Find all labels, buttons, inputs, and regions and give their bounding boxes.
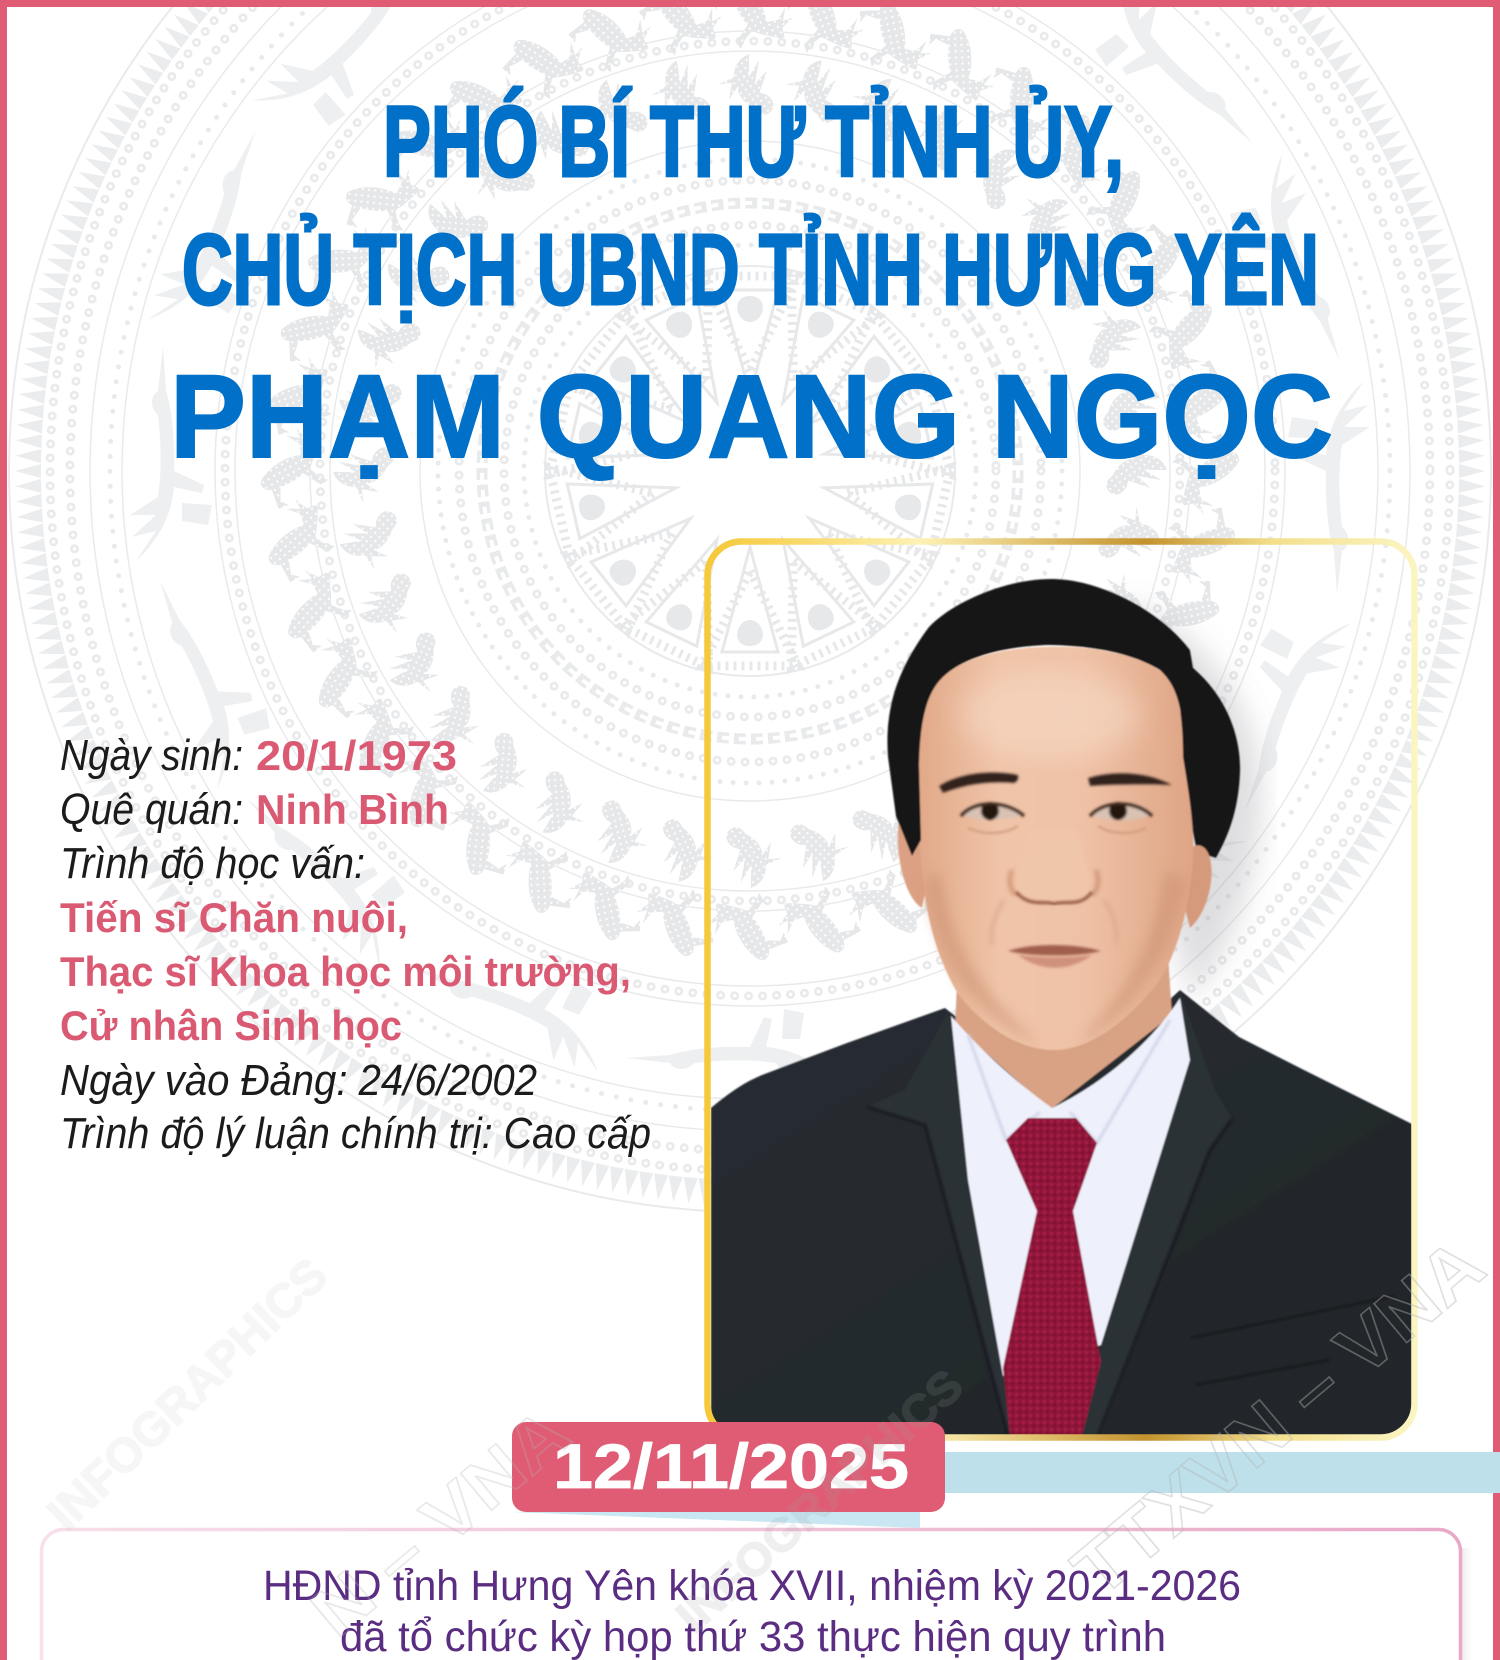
face xyxy=(917,647,1193,1050)
hair xyxy=(887,579,1197,856)
panel text xyxy=(263,1562,1241,1660)
education degrees xyxy=(60,894,631,1049)
watermarks xyxy=(38,1222,1499,1651)
left ear xyxy=(896,822,926,908)
birth date xyxy=(60,731,457,780)
birth date: Ngày sinh: xyxy=(60,731,243,780)
biography text block xyxy=(60,731,651,1158)
hometown xyxy=(60,785,449,834)
date badge xyxy=(512,1422,945,1512)
hometown: Ninh Bình xyxy=(256,786,449,833)
panel edge shadow xyxy=(1462,1548,1472,1660)
blue ribbon right of date xyxy=(945,1452,1500,1493)
eyes xyxy=(961,802,1152,833)
portrait photo xyxy=(711,579,1412,1440)
panel text: HĐND tỉnh Hưng Yên khóa XVII, nhiệm kỳ 2021-2026 xyxy=(263,1562,1241,1610)
political level: Trình độ lý luận chính trị: Cao cấp xyxy=(60,1109,651,1158)
title line 1: PHÓ BÍ THƯ TỈNH ỦY, xyxy=(383,86,1124,198)
party date: Ngày vào Đảng: 24/6/2002 xyxy=(60,1056,537,1105)
title name: PHẠM QUANG NGỌC xyxy=(170,351,1333,483)
lapel shading xyxy=(948,1008,1230,1434)
tie xyxy=(1003,1118,1101,1436)
gold photo frame xyxy=(708,542,1414,1438)
education degrees: Tiến sĩ Chăn nuôi, xyxy=(60,894,408,941)
nose xyxy=(1016,830,1091,905)
info panel xyxy=(42,1530,1460,1660)
neck xyxy=(955,955,1172,1110)
education degrees: Thạc sĩ Khoa học môi trường, xyxy=(60,948,631,995)
title xyxy=(170,86,1333,483)
shirt xyxy=(951,998,1190,1376)
forehead highlight xyxy=(960,670,1140,760)
watermark: infographics centre: INFOGRAPHICS xyxy=(666,1359,973,1642)
right ear xyxy=(1185,844,1212,928)
cheek shading xyxy=(925,870,1186,1045)
education label: Trình độ học vấn: xyxy=(60,839,365,888)
blue wedge under date xyxy=(512,1512,920,1528)
nasolabial folds xyxy=(992,900,1116,945)
suit xyxy=(711,990,1412,1440)
date: 12/11/2025 xyxy=(553,1432,909,1502)
education degrees: Cử nhân Sinh học xyxy=(60,1002,402,1049)
mouth xyxy=(1008,945,1101,956)
watermark: VNA centre: N – VNA xyxy=(297,1392,584,1651)
hometown: Quê quán: xyxy=(60,785,243,834)
watermark: infographics left: INFOGRAPHICS xyxy=(38,1249,338,1541)
soft shadow behind head xyxy=(1120,600,1262,1000)
panel text: đã tổ chức kỳ họp thứ 33 thực hiện quy trình xyxy=(340,1613,1166,1660)
watermark: TTXVN VNA right: TTXVN – VNA xyxy=(1057,1222,1499,1612)
shirt collar shadow xyxy=(968,1020,1170,1143)
birth date: 20/1/1973 xyxy=(256,732,457,779)
eyebrows xyxy=(939,773,1172,793)
right hair tuft xyxy=(1178,660,1240,858)
